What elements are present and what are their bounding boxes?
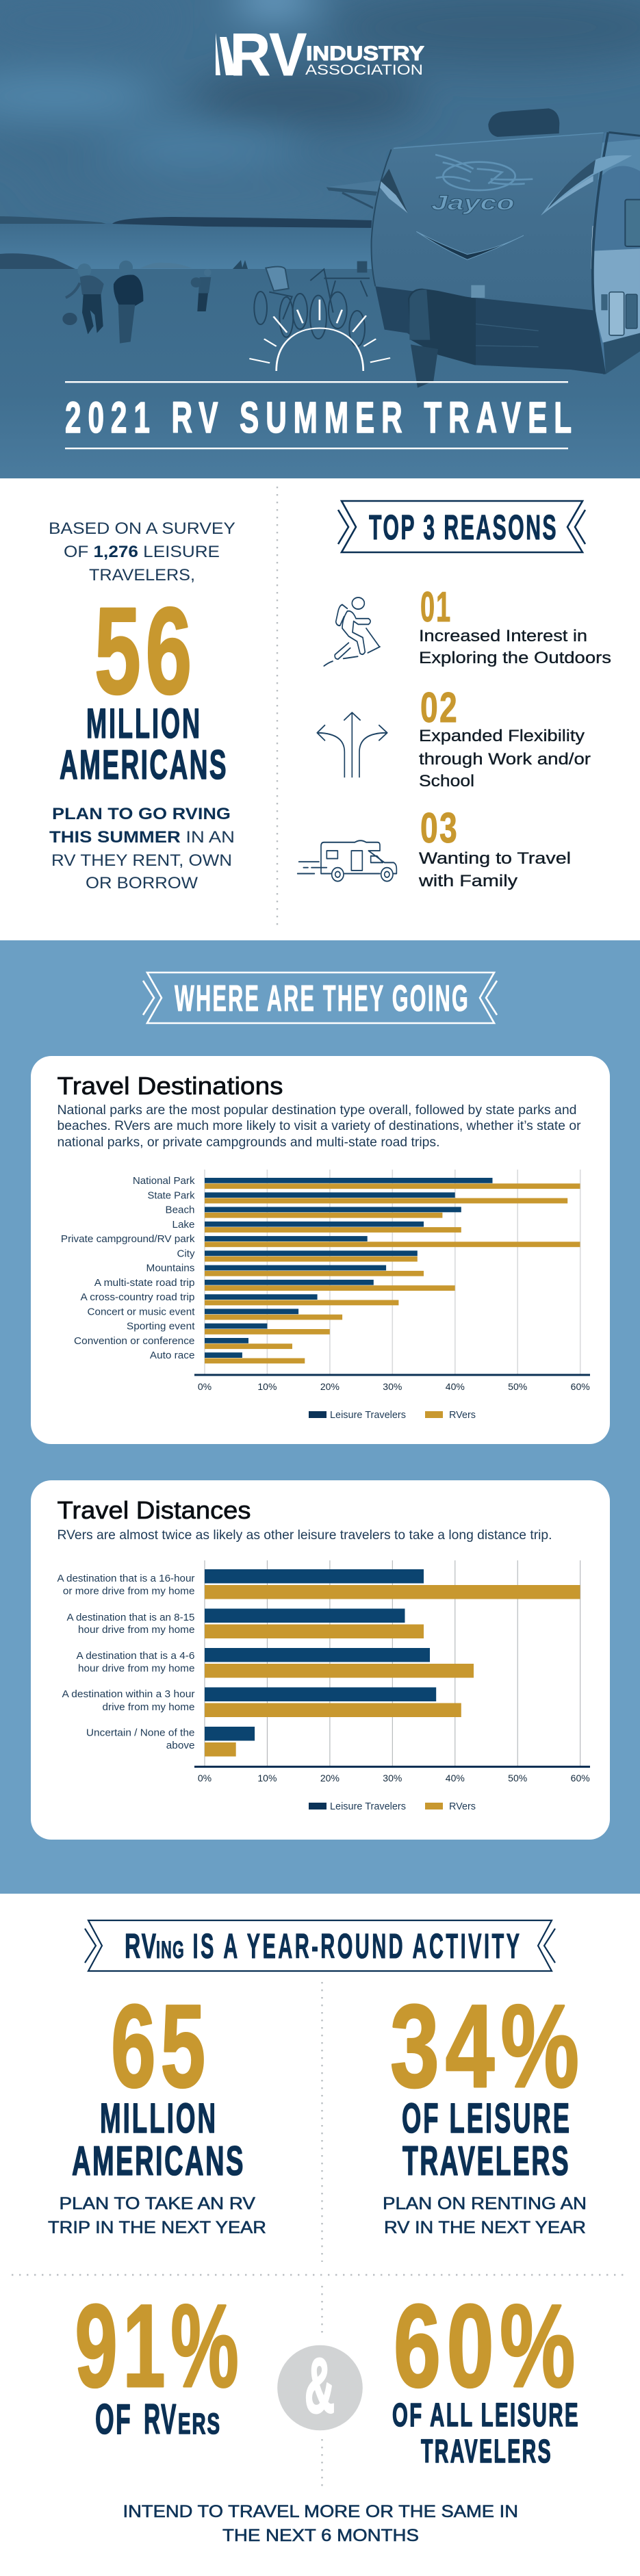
description text: beaches. RVers are much more likely to visit a variety of destinations, whether it’s state or <box>57 1119 581 1133</box>
bar chart: distances <box>57 1560 590 1783</box>
bicycles and picnic table <box>254 261 370 346</box>
bar chart: destinations: A multi-state road trip <box>94 1278 194 1289</box>
reason 1: Exploring the Outdoors <box>419 649 611 667</box>
reason 2: Expanded Flexibility <box>419 727 585 745</box>
stat: 60% of all leisure travelers: TRAVELERS <box>421 2434 552 2470</box>
reason 2 <box>317 684 591 790</box>
reason 1: 01 <box>420 584 452 631</box>
closing statement <box>123 2502 518 2545</box>
plan to go rving text: THIS SUMMER IN AN <box>49 828 235 847</box>
reason 3: Wanting to Travel <box>419 849 571 868</box>
stat: 65 million americans <box>48 1981 266 2237</box>
bar chart: destinations: Concert or music event <box>88 1306 194 1317</box>
logo <box>216 21 424 88</box>
bar chart: distances: A destination within a 3 hour <box>62 1689 195 1700</box>
stat: 65 million americans: TRIP IN THE NEXT YEAR <box>48 2218 266 2237</box>
panel: where are they going <box>0 940 640 1894</box>
bar chart: destinations: 30% <box>383 1381 402 1392</box>
trailer brand lettering: Jayco <box>431 192 515 215</box>
people playing on the beach <box>62 261 212 344</box>
bar chart: destinations: 0% <box>198 1381 212 1392</box>
stat: 60% of all leisure travelers <box>392 2280 581 2470</box>
logo: INDUSTRY <box>306 42 424 65</box>
banner: top 3 reasons <box>338 501 585 552</box>
stat: 91% of RVers: ERS <box>178 2408 221 2440</box>
stat: 65 million americans: PLAN TO TAKE AN RV <box>59 2194 255 2213</box>
reason 2: through Work and/or <box>419 750 591 769</box>
bar chart: distances: 50% <box>508 1773 527 1783</box>
legend: Leisure Travelers <box>330 1409 406 1421</box>
bar chart: distances: A destination that is a 4-6 <box>77 1651 194 1662</box>
ampersand badge <box>277 2343 363 2430</box>
bar chart: distances: A destination that is a 16-hour <box>57 1573 195 1584</box>
bar chart: distances: 20% <box>320 1773 340 1783</box>
bar chart: destinations: National Park <box>133 1176 195 1187</box>
description text: National parks are the most popular destination type overall, followed by state parks and <box>57 1103 576 1118</box>
legend: RVers <box>449 1409 476 1421</box>
bar chart: distances: Uncertain / None of the <box>86 1727 194 1738</box>
ampersand badge: & <box>305 2343 335 2430</box>
reason 3: 03 <box>420 805 459 852</box>
stat: 34% of leisure travelers: PLAN ON RENTING AN <box>383 2194 587 2213</box>
heading: travel destinations: Travel Destinations <box>57 1072 283 1100</box>
closing statement: THE NEXT 6 MONTHS <box>222 2526 419 2545</box>
stat: 65 million americans: MILLION <box>100 2095 218 2141</box>
bar chart: distances: above <box>166 1740 194 1751</box>
stat: 91% of RVers: OF <box>95 2396 132 2443</box>
bar chart: destinations: Auto race <box>150 1350 194 1361</box>
bar chart: destinations: 40% <box>446 1381 465 1392</box>
bar chart: destinations: Private campground/RV park <box>61 1234 195 1245</box>
bar chart: distances: drive from my home <box>103 1702 194 1713</box>
stat: 65 million americans: 65 <box>111 1981 210 2112</box>
travel trailer <box>327 108 640 388</box>
bar chart: distances: or more drive from my home <box>63 1586 194 1597</box>
bar chart: destinations: Sporting event <box>127 1322 194 1332</box>
stat: 65 million americans: AMERICANS <box>72 2138 245 2184</box>
million americans: AMERICANS <box>60 742 228 788</box>
stat: 34% of leisure travelers: RV IN THE NEXT YEAR <box>384 2218 586 2237</box>
reason 3: with Family <box>418 872 517 890</box>
bar chart: destinations: Convention or conference <box>74 1336 194 1347</box>
banner: RVing is a year-round activity <box>85 1920 555 1971</box>
stat: 91% of RVers: RV <box>144 2396 177 2443</box>
bar chart: destinations: 50% <box>508 1381 527 1392</box>
bar chart: destinations: A cross-country road trip <box>81 1292 194 1303</box>
bar chart: distances: 10% <box>257 1773 277 1783</box>
closing statement: INTEND TO TRAVEL MORE OR THE SAME IN <box>123 2502 518 2521</box>
bar chart: destinations: Beach <box>166 1205 194 1215</box>
survey intro text: TRAVELERS, <box>89 566 195 584</box>
survey intro text: OF 1,276 LEISURE <box>64 543 220 561</box>
bar chart: distances: A destination that is an 8-15 <box>67 1612 194 1623</box>
reason 2: 02 <box>420 684 459 732</box>
reason 3 <box>298 805 571 890</box>
legend: RVers <box>449 1801 476 1812</box>
stat: 91% of RVers <box>75 2280 244 2443</box>
survey intro text: BASED ON A SURVEY <box>49 519 235 538</box>
bar chart: destinations <box>61 1170 590 1392</box>
panel: year-round activity <box>48 1920 587 2545</box>
description text: national parks, or private campgrounds and multi-state road trips. <box>57 1135 439 1150</box>
plan to go rving text: RV THEY RENT, OWN <box>51 851 232 870</box>
reason 1: Increased Interest in <box>419 627 587 645</box>
bar chart: destinations: Mountains <box>146 1263 194 1274</box>
bar chart: destinations: City <box>177 1248 195 1259</box>
logo: RV <box>230 21 307 88</box>
stat: 34% of leisure travelers <box>383 1981 587 2237</box>
big number 56: 56 <box>94 582 196 720</box>
legend <box>309 1409 476 1421</box>
panel: survey summary <box>49 519 235 892</box>
plan to go rving text <box>49 805 235 892</box>
legend: Leisure Travelers <box>330 1801 406 1812</box>
bar chart: distances: hour drive from my home <box>78 1663 194 1674</box>
photo background: sky, water, beach <box>0 0 640 478</box>
description text <box>57 1103 581 1150</box>
panel: top 3 reasons <box>298 501 611 890</box>
bar chart: distances: 0% <box>198 1773 212 1783</box>
icon: moving RV <box>298 840 396 881</box>
bar chart: distances: hour drive from my home <box>78 1625 194 1636</box>
plan to go rving text: PLAN TO GO RVING <box>52 805 231 823</box>
icon: rising sun <box>249 300 390 371</box>
reason 2: School <box>419 772 474 790</box>
bar chart: destinations: 10% <box>257 1381 277 1392</box>
million americans <box>60 700 228 788</box>
banner: RVing is a year-round activity: ING <box>156 1937 185 1963</box>
description text: RVers are almost twice as likely as other leisure travelers to take a long distance trip. <box>57 1528 552 1543</box>
legend <box>309 1801 476 1812</box>
icon: diverging arrows <box>317 712 387 777</box>
bar chart: destinations: 20% <box>320 1381 340 1392</box>
survey intro text <box>49 519 235 584</box>
heading: travel distances: Travel Distances <box>57 1496 251 1524</box>
bar chart: distances: 30% <box>383 1773 402 1783</box>
logo: ASSOCIATION <box>305 62 423 78</box>
banner: RVing is a year-round activity: RV <box>125 1927 157 1966</box>
bar chart: destinations: 60% <box>571 1381 590 1392</box>
card: travel distances <box>31 1480 610 1840</box>
bar chart: destinations: Lake <box>172 1220 194 1231</box>
million americans: MILLION <box>86 700 202 747</box>
stat: 91% of RVers: 91% <box>75 2280 244 2412</box>
bar chart: distances: 60% <box>571 1773 590 1783</box>
banner: where are they going <box>143 973 497 1023</box>
card: travel destinations <box>31 1056 610 1444</box>
hero photo banner <box>0 0 640 478</box>
reason 1 <box>324 584 611 667</box>
bar chart: destinations: State Park <box>148 1190 195 1201</box>
bar chart: distances: 40% <box>446 1773 465 1783</box>
icon: hiker <box>324 597 380 666</box>
plan to go rving text: OR BORROW <box>86 874 198 892</box>
